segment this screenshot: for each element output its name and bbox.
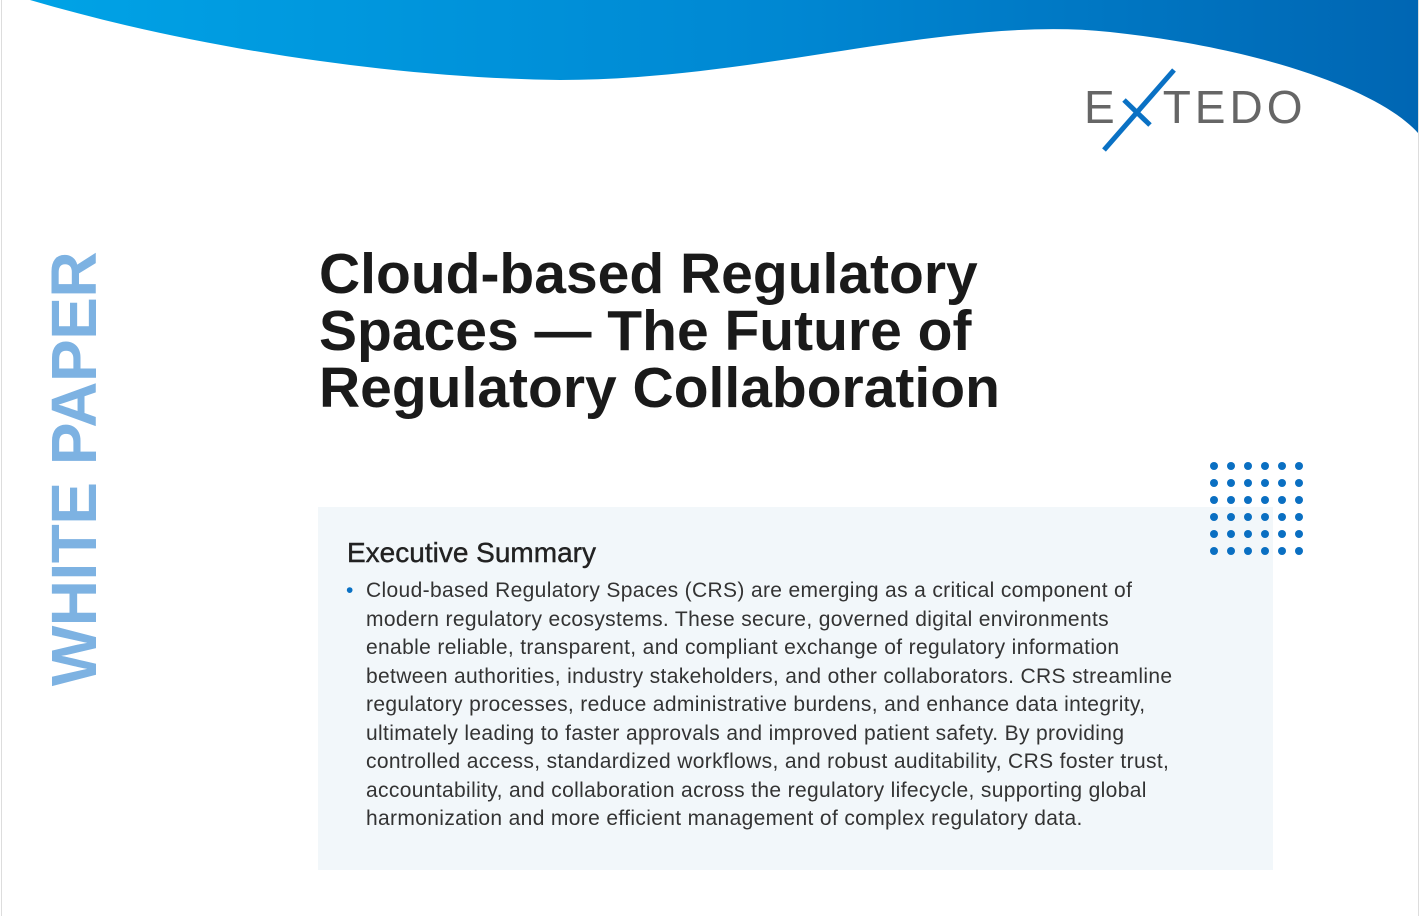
bullet text: modern regulatory ecosystems. These secure, governed digital environments [366,608,1109,630]
bullet text: enable reliable, transparent, and compliant exchange of regulatory information [366,636,1119,659]
dot grid decoration [1210,462,1303,555]
title [319,242,1000,420]
vertical label: white paper: WHITE PAPER [38,252,110,686]
bullet text: ultimately leading to faster approvals and improved patient safety. By providing [366,722,1124,744]
bullet text: Cloud-based Regulatory Spaces (CRS) are emerging as a critical component of [366,579,1132,602]
bullet text: between authorities, industry stakeholders, and other collaborators. CRS streamline [366,664,1172,688]
bullet text: controlled access, standardized workflows, and robust auditability, CRS foster trust, [366,750,1169,773]
bullet text: accountability, and collaboration across the regulatory lifecycle, supporting global [366,778,1147,802]
bullet text: regulatory processes, reduce administrative burdens, and enhance data integrity, [366,693,1145,716]
bullet text [346,579,1172,830]
bullet text: harmonization and more efficient management of complex regulatory data. [366,807,1083,830]
executive summary panel: • [346,579,354,602]
title: Cloud-based Regulatory [319,242,978,306]
executive summary panel [318,507,1273,870]
heading: Executive Summary [347,537,596,568]
header wave [30,0,1418,133]
logo: E TEDO [1084,81,1306,133]
title: Regulatory Collaboration [319,356,1000,420]
logo [1084,68,1306,152]
title: Spaces — The Future of [319,299,971,363]
